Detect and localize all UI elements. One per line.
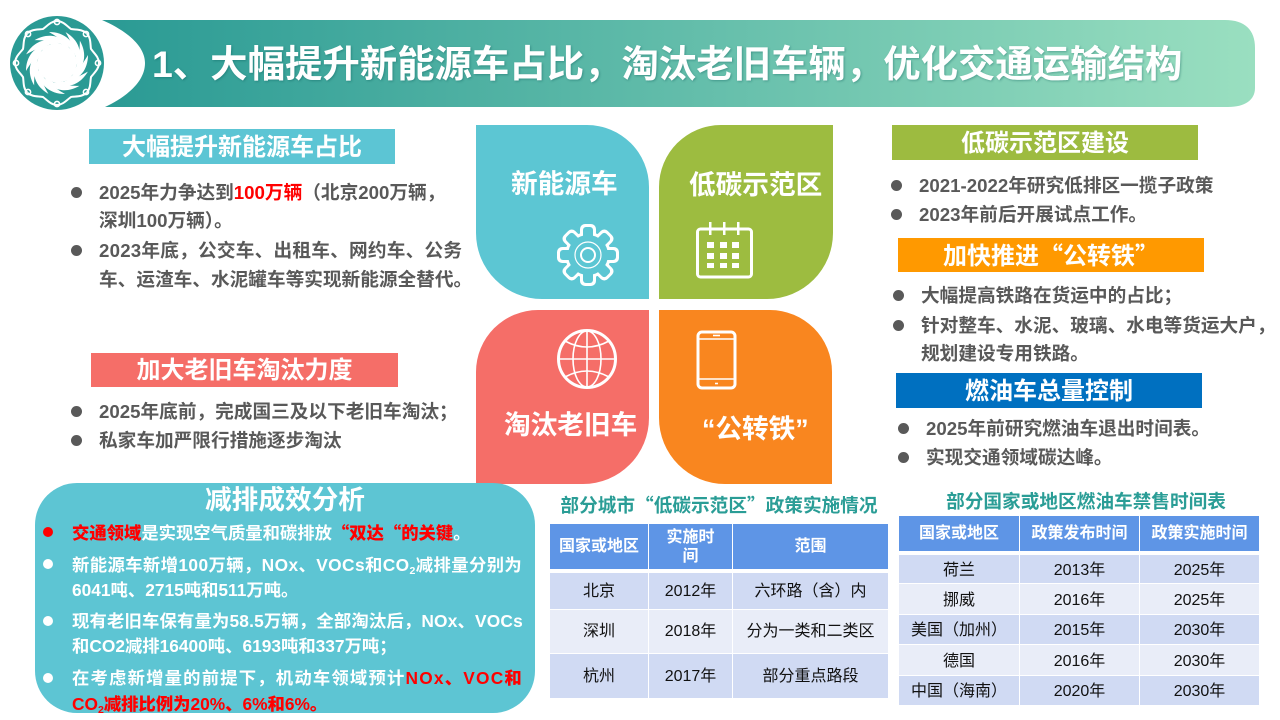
table: low-carbon zones: 2012年 xyxy=(665,582,716,600)
icon: tablet xyxy=(696,330,736,390)
heading: fuel vehicle control: 燃油车总量控制 xyxy=(965,378,1133,405)
table: fuel vehicle bans: 荷兰 xyxy=(943,562,975,578)
label: road to rail: “公转铁” xyxy=(702,414,809,444)
table: fuel vehicle bans: 2025年 xyxy=(1174,592,1225,608)
label: phase-out: 淘汰老旧车 xyxy=(504,410,637,440)
central four-petal diagram xyxy=(476,125,833,484)
table: low-carbon zones: 杭州 xyxy=(583,668,615,684)
bullet list: emission reduction analysis: 6041吨、2715吨和511万吨。 xyxy=(72,580,298,600)
panel: new energy vehicles xyxy=(71,129,472,290)
icon: globe xyxy=(557,329,617,389)
bullet text: low-carbon zone construction xyxy=(891,175,1213,225)
heading: fuel vehicle control xyxy=(896,373,1202,408)
table: fuel vehicle bans: 2016年 xyxy=(1054,652,1105,670)
bullet text: new energy vehicles: 深圳100万辆）。 xyxy=(99,210,233,231)
header banner xyxy=(102,20,1255,107)
petal: phase-out xyxy=(476,310,649,484)
table: fuel vehicle bans: 2013年 xyxy=(1054,562,1105,578)
table: fuel vehicle bans: 2016年 xyxy=(1054,592,1105,608)
bullet list: emission reduction analysis: 新能源车新增100万辆，NOx、VOCs和CO2减排量分别为 xyxy=(72,555,522,577)
label: new energy vehicles: 新能源车 xyxy=(511,169,618,199)
petal: low-carbon zone xyxy=(659,125,833,299)
table: fuel vehicle bans: 2030年 xyxy=(1174,652,1225,670)
table: fuel vehicle bans xyxy=(899,516,1259,705)
table: fuel vehicle bans: 2030年 xyxy=(1174,622,1225,639)
heading: road to rail measures xyxy=(898,238,1204,272)
heading: road to rail measures: 加快推进“公转铁” xyxy=(943,236,1159,271)
bullet text: new energy vehicles: 2025年力争达到100万辆（北京200万辆， xyxy=(99,182,445,203)
table: low-carbon zones: 分为一类和二类区 xyxy=(746,623,874,640)
table: fuel vehicle bans: 政策发布时间 xyxy=(1031,525,1128,542)
bullet text: fuel vehicle control xyxy=(898,418,1210,468)
bullet list: emission reduction analysis: 交通领域是实现空气质量和碳排放“双达“的关键。 xyxy=(72,519,471,544)
table: low-carbon zones: 2018年 xyxy=(665,623,716,640)
petal: road to rail xyxy=(659,310,832,484)
table: fuel vehicle bans: 2015年 xyxy=(1054,622,1105,639)
title: 1、大幅提升新能源车占比，淘汰老旧车辆，优化交通运输结构 xyxy=(152,43,1182,85)
panel: fuel vehicle control xyxy=(896,373,1210,468)
table: fuel vehicle bans: 美国（加州） xyxy=(911,622,1007,639)
heading: old vehicle phase-out: 加大老旧车淘汰力度 xyxy=(136,357,352,384)
panel: old vehicle phase-out xyxy=(71,353,458,451)
label: low-carbon zone: 低碳示范区 xyxy=(689,170,822,200)
bullet text: road to rail measures: 大幅提高铁路在货运中的占比； xyxy=(921,285,1182,306)
icon: calendar xyxy=(696,222,753,278)
bullet list: emission reduction analysis xyxy=(43,519,523,713)
bullet text: low-carbon zone construction: 2023年前后开展试点工作。 xyxy=(919,204,1147,225)
heading: old vehicle phase-out xyxy=(91,353,398,387)
bullet text: fuel vehicle control: 2025年前研究燃油车退出时间表。 xyxy=(926,418,1210,439)
heading: low-carbon zone construction xyxy=(892,125,1198,160)
bullet list: emission reduction analysis: 在考虑新增量的前提下，机动车领域预计NOx、VOC和 xyxy=(72,668,523,688)
heading: new energy vehicles: 大幅提升新能源车占比 xyxy=(122,134,362,161)
panel: low-carbon zone construction xyxy=(891,125,1213,225)
table: low-carbon zones: 深圳 xyxy=(583,623,615,640)
table: low-carbon zones: 部分重点路段 xyxy=(762,668,858,684)
table: fuel vehicle bans: 2025年 xyxy=(1174,562,1225,578)
heading: low-carbon zone construction: 低碳示范区建设 xyxy=(961,130,1129,157)
bullet text: fuel vehicle control: 实现交通领域碳达峰。 xyxy=(926,447,1113,468)
table title: fuel vehicle bans: 部分国家或地区燃油车禁售时间表 xyxy=(946,491,1226,512)
petal: new energy vehicles xyxy=(476,125,649,299)
bullet text: new energy vehicles xyxy=(71,182,472,290)
table: low-carbon zones: 2017年 xyxy=(665,668,716,684)
bullet text: old vehicle phase-out xyxy=(71,401,458,451)
heading: new energy vehicles xyxy=(89,129,395,164)
table: fuel vehicle bans: 德国 xyxy=(943,652,975,670)
table: fuel vehicle bans: 政策实施时间 xyxy=(1151,525,1248,542)
bullet list: emission reduction analysis: 和CO2减排16400吨、6193吨和337万吨； xyxy=(72,636,397,656)
table: fuel vehicle bans: 中国（海南） xyxy=(911,683,1007,700)
bullet text: old vehicle phase-out: 2025年底前，完成国三及以下老旧车淘汰； xyxy=(99,401,458,422)
bullet text: road to rail measures: 规划建设专用铁路。 xyxy=(921,343,1089,364)
table: low-carbon zones: 六环路（含）内 xyxy=(754,582,866,600)
panel: emission reduction analysis xyxy=(35,483,535,713)
table: fuel vehicle bans: 挪威 xyxy=(943,592,975,608)
logo xyxy=(10,16,104,110)
table: low-carbon zones xyxy=(550,524,888,698)
table: low-carbon zones: 间 xyxy=(682,548,698,564)
bullet text: road to rail measures: 针对整车、水泥、玻璃、水电等货运大户， xyxy=(921,315,1275,336)
table: fuel vehicle bans: 2020年 xyxy=(1054,683,1105,700)
table: fuel vehicle bans: 2030年 xyxy=(1174,683,1225,700)
icon: gear xyxy=(557,224,619,286)
table: low-carbon zones: 国家或地区 xyxy=(559,538,639,555)
panel: road to rail measures xyxy=(893,236,1275,364)
table: fuel vehicle bans: 国家或地区 xyxy=(919,525,999,542)
bullet list: emission reduction analysis: 现有老旧车保有量为58.5万辆，全部淘汰后，NOx、VOCs xyxy=(72,611,523,631)
table title: low-carbon zones: 部分城市“低碳示范区”政策实施情况 xyxy=(560,491,878,518)
bullet text: old vehicle phase-out: 私家车加严限行措施逐步淘汰 xyxy=(99,430,342,451)
bullet text: new energy vehicles: 车、运渣车、水泥罐车等实现新能源全替代。 xyxy=(99,269,472,290)
bullet text: low-carbon zone construction: 2021-2022年研究低排区一揽子政策 xyxy=(919,175,1213,196)
table: low-carbon zones: 实施时 xyxy=(666,528,714,546)
heading: emission reduction analysis: 减排成效分析 xyxy=(205,485,365,515)
bullet text: road to rail measures xyxy=(893,285,1275,364)
bullet text: new energy vehicles: 2023年底，公交车、出租车、网约车、公务 xyxy=(99,240,462,261)
table: low-carbon zones: 范围 xyxy=(794,538,826,555)
table: low-carbon zones: 北京 xyxy=(583,582,615,600)
